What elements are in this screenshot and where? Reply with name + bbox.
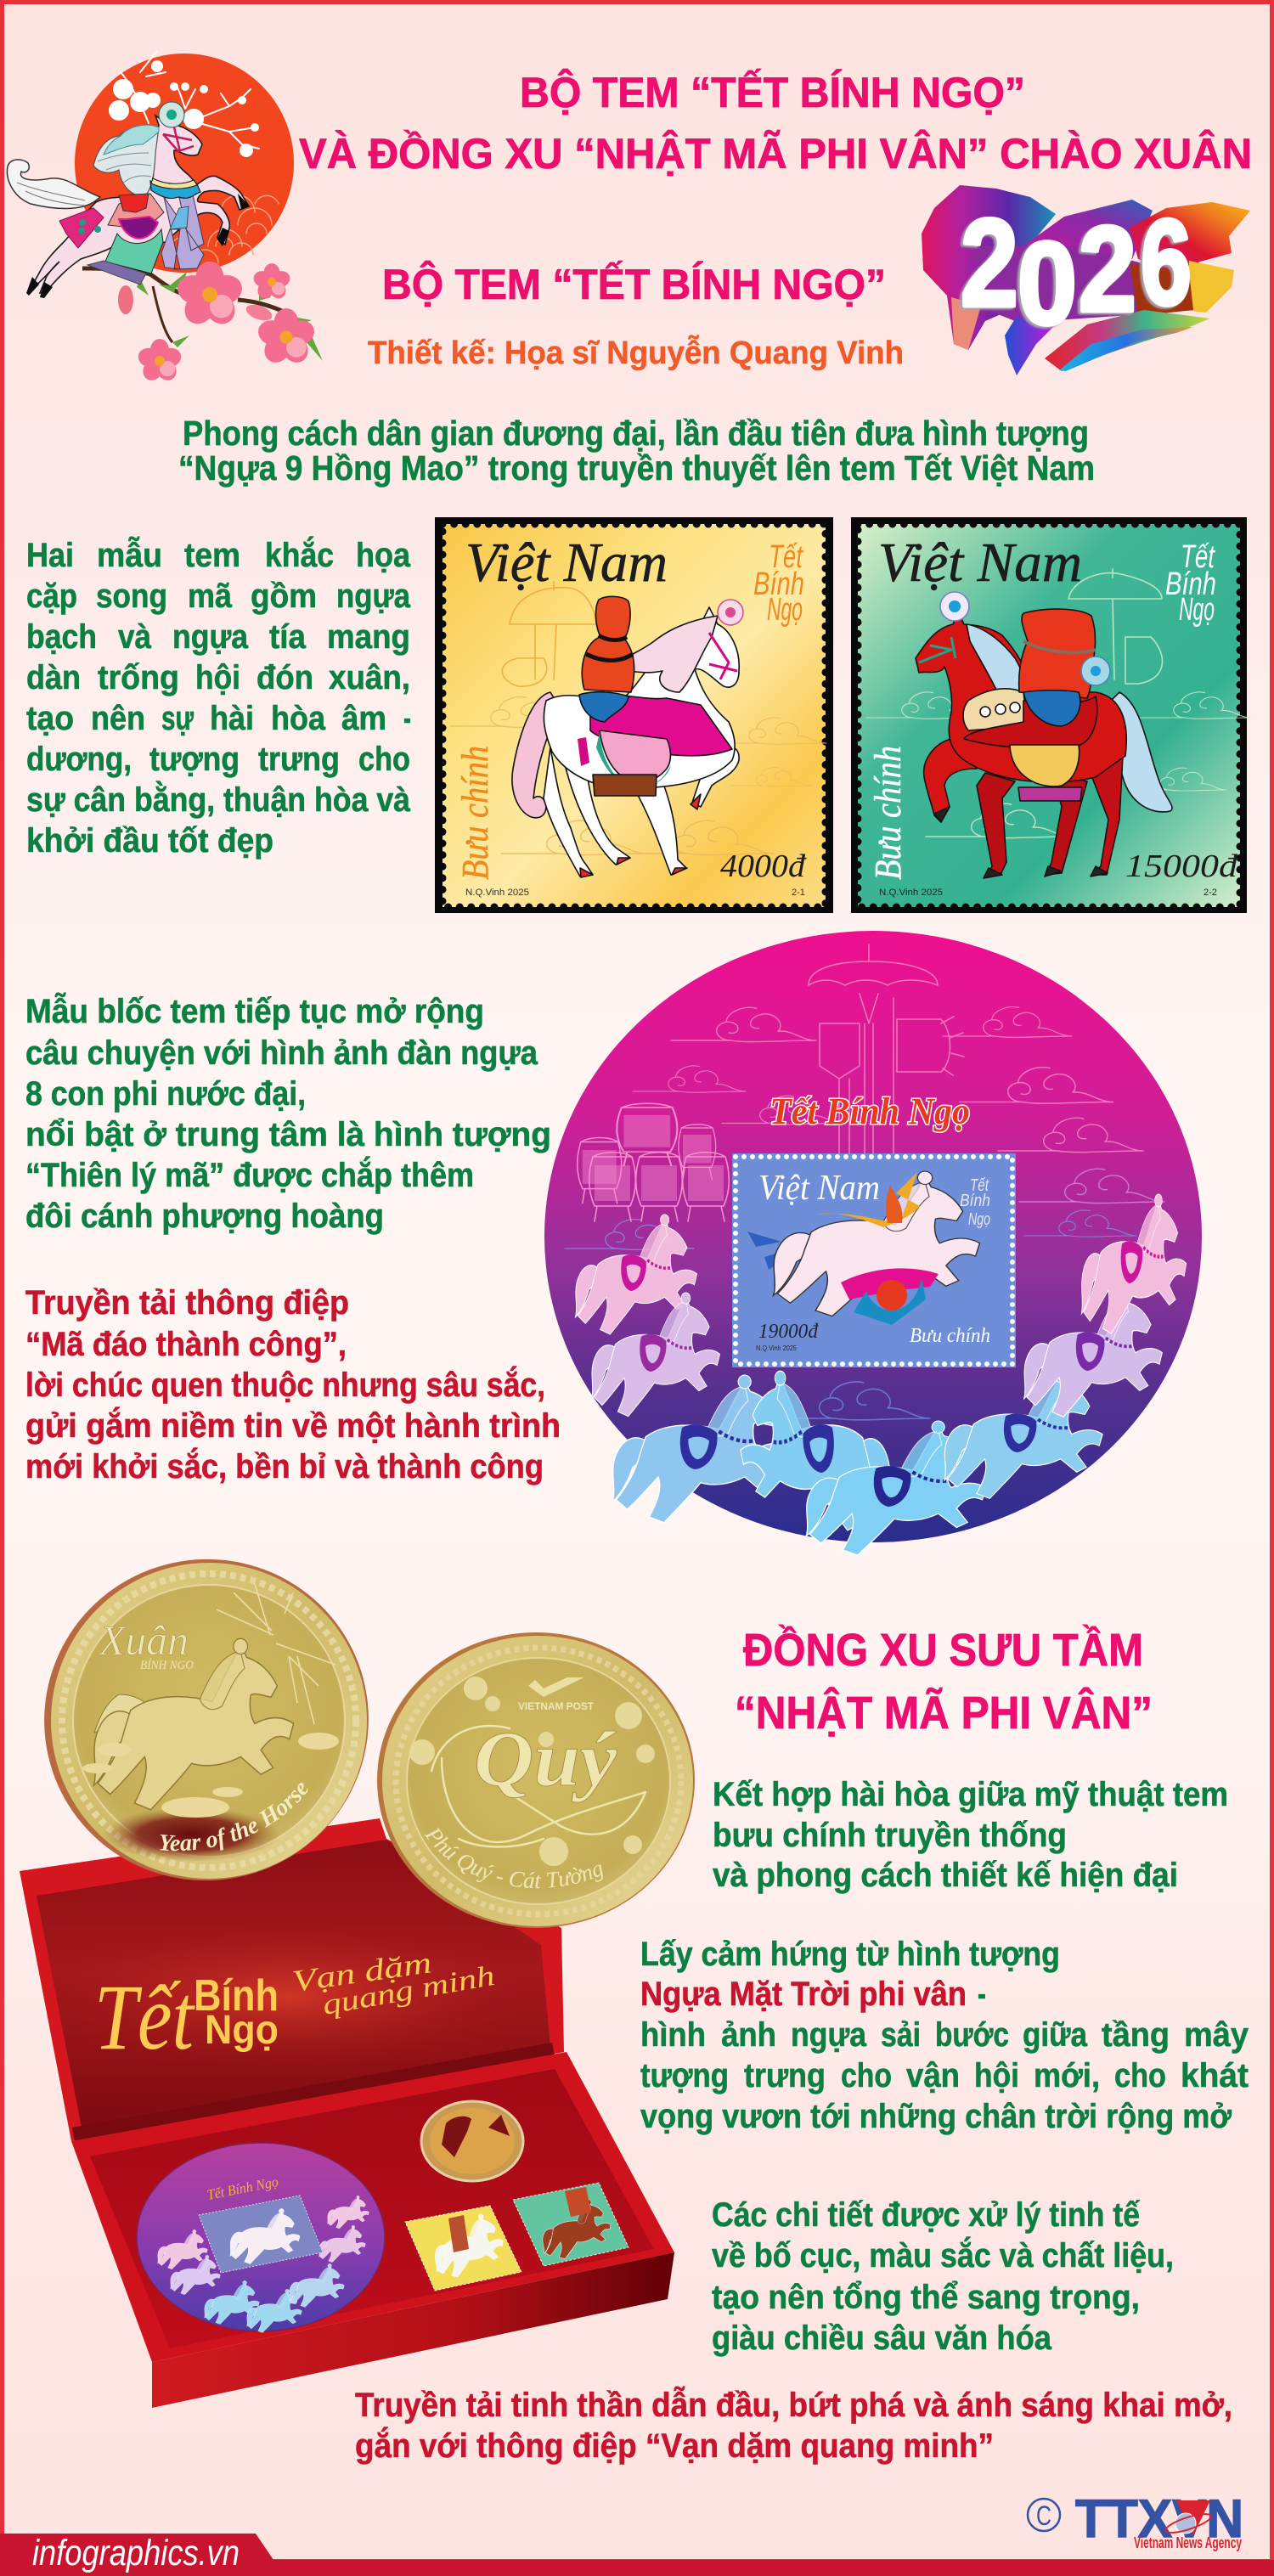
text: stamp description: sự bbox=[161, 700, 194, 737]
stamp 2 lettering: 15000đ bbox=[1125, 848, 1239, 884]
text: closing message: gắn với thông điệp “Vạn dặm quang minh” bbox=[355, 2426, 994, 2465]
text: stamp description: cho bbox=[358, 741, 410, 778]
stamp 1 lettering: Việt Nam bbox=[465, 532, 668, 594]
stamp 1 lettering: 4000đ bbox=[720, 848, 807, 884]
text: stamp description: hài bbox=[210, 700, 254, 737]
footer band bbox=[0, 2534, 1274, 2576]
2026 digits: 6 bbox=[1141, 195, 1192, 330]
text: coin inspiration: tầng bbox=[1102, 2016, 1170, 2054]
text: miniature sheet description: 8 con phi nước đại, bbox=[25, 1075, 306, 1113]
intro text: Phong cách dân gian đương đại, lần đầu tiên đưa hình tượng bbox=[183, 414, 1089, 453]
text: coin inspiration: vận bbox=[906, 2057, 960, 2094]
text: message bbox=[25, 1284, 561, 1485]
coin value lettering: Quý bbox=[474, 1716, 617, 1802]
footer brand: infographics.vn bbox=[32, 2533, 240, 2573]
text: coin details: Các chi tiết được xử lý tinh tế bbox=[712, 2196, 1141, 2234]
text: coin inspiration: mới, bbox=[1034, 2057, 1100, 2094]
text: miniature sheet description: Mẫu blốc tem tiếp tục mở rộng bbox=[25, 991, 484, 1030]
text: coin inspiration: mây bbox=[1184, 2016, 1249, 2054]
galloping horses bbox=[575, 1194, 1187, 1555]
coin value lettering: VIETNAM POST bbox=[518, 1700, 595, 1712]
text: coin harmony: bưu chính truyền thống bbox=[713, 1817, 1067, 1854]
branch and flowers bbox=[82, 262, 323, 384]
gift box bbox=[20, 1818, 674, 2408]
central stamp: Ngọ bbox=[968, 1210, 990, 1229]
text: stamp description: tượng bbox=[149, 741, 240, 778]
text: stamp description: hòa bbox=[271, 700, 326, 737]
stamp 1 lettering: 2-1 bbox=[792, 888, 805, 898]
text: stamp description: dàn bbox=[26, 659, 81, 696]
title: VÀ ĐỒNG XU “NHẬT MÃ PHI VÂN” CHÀO XUÂN bbox=[299, 130, 1252, 178]
text: stamp description: cặp bbox=[26, 578, 77, 615]
text: stamp description: tía bbox=[269, 618, 307, 656]
illustration: sun, horse and peach blossom bbox=[7, 51, 323, 384]
stamp 1 lettering: N.Q.Vinh 2025 bbox=[465, 888, 529, 898]
text: coin inspiration: - bbox=[978, 1976, 986, 2013]
text: coin inspiration: cho bbox=[841, 2057, 892, 2094]
lid lettering: quang minh bbox=[320, 1960, 497, 2021]
2026 digits bbox=[961, 194, 1192, 349]
sun blossoms bbox=[109, 51, 259, 157]
coin lettering: Year of the Horse bbox=[160, 1783, 307, 1852]
text: stamp description: ngựa bbox=[336, 578, 411, 615]
mini sheet disc: Tết Bính Ngọ bbox=[206, 2173, 279, 2203]
stamp 1 lettering: Ngọ bbox=[767, 592, 803, 628]
stamp 2 lettering: Bưu chính bbox=[867, 746, 909, 880]
coin horse bbox=[93, 1638, 294, 1810]
designer credit: Thiết kế: Họa sĩ Nguyễn Quang Vinh bbox=[368, 334, 904, 371]
title: BỘ TEM “TẾT BÍNH NGỌ” bbox=[520, 68, 1025, 116]
text: stamp description bbox=[26, 535, 411, 860]
text: stamp description: mã bbox=[188, 578, 233, 615]
text: miniature sheet description: nổi bật ở trung tâm là hình tượng bbox=[25, 1116, 551, 1153]
copyright mark bbox=[1028, 2499, 1060, 2531]
mini stamp red horse bbox=[513, 2183, 629, 2266]
heading: collectible coin bbox=[735, 1625, 1153, 1739]
lid lettering: Vạn dặm bbox=[290, 1945, 434, 1998]
text: stamp description: nên bbox=[91, 700, 145, 737]
mini stamp white horse bbox=[405, 2206, 521, 2291]
text: coin harmony bbox=[713, 1776, 1228, 1894]
coin clouds bbox=[82, 1733, 339, 1818]
text: stamp description: - bbox=[403, 700, 411, 737]
stamp 2 lettering: Bính bbox=[1165, 566, 1216, 602]
2026 digits: 2 bbox=[1079, 202, 1136, 337]
text: stamp description: song bbox=[96, 578, 167, 615]
heading: collectible coin: “NHẬT MÃ PHI VÂN” bbox=[735, 1687, 1153, 1739]
TTXVN logo: TTXVN bbox=[1075, 2489, 1243, 2549]
box tray bbox=[71, 2052, 674, 2408]
stamp 2 lettering: N.Q.Vinh 2025 bbox=[879, 888, 943, 898]
text: coin inspiration: hình bbox=[640, 2016, 706, 2054]
mini sheet disc bbox=[137, 2143, 385, 2332]
central stamp: 19000đ bbox=[758, 1321, 819, 1343]
coin value lettering: Phú Quý - Cát Tường bbox=[425, 1828, 603, 1889]
text: coin inspiration: Ngựa Mặt Trời phi vân bbox=[640, 1976, 967, 2013]
text: coin inspiration: ngựa bbox=[791, 2016, 867, 2054]
text: coin inspiration: hội bbox=[974, 2057, 1019, 2094]
text: coin inspiration: ảnh bbox=[721, 2016, 776, 2054]
box lid bbox=[20, 1818, 564, 2141]
central stamp: Việt Nam bbox=[758, 1169, 880, 1208]
text: stamp description: và bbox=[118, 618, 152, 656]
stamp 1 lettering: Bính bbox=[753, 566, 804, 602]
stamp 1 lettering: Tết bbox=[769, 539, 803, 575]
2026 digits: 0 bbox=[1018, 218, 1077, 349]
stamp 2 lettering: Tết bbox=[1181, 539, 1215, 575]
central stamp: Bưu chính bbox=[910, 1325, 990, 1347]
central stamp: N.Q.Vinh 2025 bbox=[756, 1344, 797, 1352]
stamp: red horse bbox=[851, 517, 1251, 913]
text: stamp description: hội bbox=[195, 659, 240, 696]
coin: value side bbox=[377, 1632, 695, 1928]
text: coin inspiration: tượng bbox=[640, 2057, 729, 2094]
text: stamp description: mẫu bbox=[97, 535, 162, 574]
text: stamp description: tem bbox=[184, 537, 240, 574]
text: message: “Mã đáo thành công”, bbox=[25, 1326, 347, 1363]
heading: collectible coin: ĐỒNG XU SƯU TẦM bbox=[743, 1625, 1143, 1676]
title bbox=[299, 68, 1252, 178]
lid lettering: Ngọ bbox=[205, 2008, 279, 2053]
coin value lettering bbox=[425, 1685, 617, 1889]
text: stamp description: tạo bbox=[26, 700, 74, 737]
text: stamp description: Hai bbox=[26, 537, 74, 574]
text: stamp description: bạch bbox=[26, 618, 97, 656]
text: miniature sheet description bbox=[25, 991, 551, 1235]
stamp 2 lettering: 2-2 bbox=[1204, 888, 1217, 898]
text: stamp description: dương, bbox=[26, 741, 132, 778]
intro text: “Ngựa 9 Hồng Mao” trong truyền thuyết lên tem Tết Việt Nam bbox=[178, 448, 1095, 488]
text: coin harmony: và phong cách thiết kế hiện đại bbox=[713, 1857, 1178, 1894]
text: stamp description: gồm bbox=[251, 578, 317, 615]
text: stamp description: ngựa bbox=[172, 618, 249, 656]
stamp 2 lettering: Việt Nam bbox=[878, 532, 1082, 594]
text: stamp description: âm bbox=[341, 700, 386, 737]
text: miniature sheet description: câu chuyện với hình ảnh đàn ngựa bbox=[25, 1034, 538, 1072]
text: stamp description: đón bbox=[256, 659, 313, 696]
text: coin inspiration: cho bbox=[1114, 2057, 1166, 2094]
stamp 1 lettering bbox=[454, 532, 807, 898]
2026 brush logo bbox=[922, 185, 1250, 375]
text: stamp description: khởi đầu tốt đẹp bbox=[26, 822, 273, 860]
text: coin inspiration: trưng bbox=[744, 2057, 826, 2094]
text: miniature sheet description: “Thiên lý mã” được chắp thêm bbox=[25, 1155, 474, 1194]
copyright mark: C bbox=[1036, 2500, 1051, 2531]
2026 digits: 2 bbox=[961, 194, 1018, 333]
mini gold coin bbox=[421, 2101, 523, 2181]
heading: stamp set: BỘ TEM “TẾT BÍNH NGỌ” bbox=[382, 260, 886, 308]
central stamp bbox=[732, 1153, 1016, 1367]
text: coin inspiration: khát bbox=[1181, 2057, 1249, 2094]
stamp: white horse bbox=[435, 517, 833, 913]
stamp 1 horse bbox=[512, 596, 743, 877]
text: coin details: giàu chiều sâu văn hóa bbox=[712, 2320, 1052, 2357]
coin post logo bbox=[528, 1677, 584, 1697]
text: coin details bbox=[712, 2196, 1174, 2357]
coin lettering bbox=[98, 1616, 307, 1852]
lid lettering: Bính bbox=[194, 1971, 279, 2021]
lid lettering bbox=[94, 1945, 497, 2069]
coin lettering: BÍNH NGỌ bbox=[140, 1658, 194, 1672]
text: message: lời chúc quen thuộc nhưng sâu sắc, bbox=[25, 1365, 545, 1404]
intro text bbox=[178, 414, 1095, 488]
text: stamp description: trống bbox=[98, 659, 179, 696]
text: message: Truyền tải thông điệp bbox=[25, 1284, 349, 1322]
text: coin details: tạo nên tổng thể sang trọng, bbox=[712, 2279, 1140, 2316]
miniature sheet disc bbox=[544, 931, 1202, 1555]
text: stamp description: khắc bbox=[265, 535, 334, 574]
lid lettering: Tết bbox=[94, 1965, 195, 2069]
text: stamp description: họa bbox=[356, 537, 411, 574]
coin lettering: Xuân bbox=[98, 1616, 189, 1664]
text: closing message bbox=[355, 2385, 1232, 2465]
text: coin inspiration bbox=[640, 1936, 1249, 2135]
text: stamp description: xuân, bbox=[329, 659, 410, 696]
stamp 2 lettering: Ngọ bbox=[1179, 592, 1215, 628]
coin flowers bbox=[409, 1677, 655, 1866]
text: miniature sheet description: đôi cánh phượng hoàng bbox=[25, 1198, 384, 1235]
text: message: mới khởi sắc, bền bỉ và thành công bbox=[25, 1446, 544, 1485]
text: stamp description: mang bbox=[327, 618, 410, 656]
stamp 2 lettering bbox=[867, 532, 1239, 898]
text: coin inspiration: giữa bbox=[1023, 2016, 1088, 2054]
leaping horse bbox=[7, 102, 250, 298]
text: coin inspiration: sải bbox=[881, 2016, 921, 2054]
sheet title: Tết Bính Ngọ bbox=[769, 1091, 970, 1132]
stamp 1 lettering: Bưu chính bbox=[454, 746, 496, 880]
sun waves bbox=[170, 195, 279, 263]
text: coin harmony: Kết hợp hài hòa giữa mỹ thuật tem bbox=[713, 1776, 1228, 1813]
central stamp: Tết bbox=[970, 1176, 989, 1195]
text: stamp description: sự cân bằng, thuận hòa và bbox=[26, 780, 411, 819]
text: message: gửi gắm niềm tin về một hành trình bbox=[25, 1406, 561, 1445]
text: coin inspiration: bước bbox=[935, 2016, 1009, 2054]
text: coin details: về bố cục, màu sắc và chất liệu, bbox=[712, 2235, 1174, 2274]
text: stamp description: trưng bbox=[258, 741, 340, 778]
stamp 2 horse bbox=[916, 592, 1172, 878]
coin: horse side bbox=[44, 1559, 369, 1880]
central stamp: Bính bbox=[960, 1192, 990, 1210]
text: coin inspiration: Lấy cảm hứng từ hình tượng bbox=[640, 1936, 1060, 1973]
